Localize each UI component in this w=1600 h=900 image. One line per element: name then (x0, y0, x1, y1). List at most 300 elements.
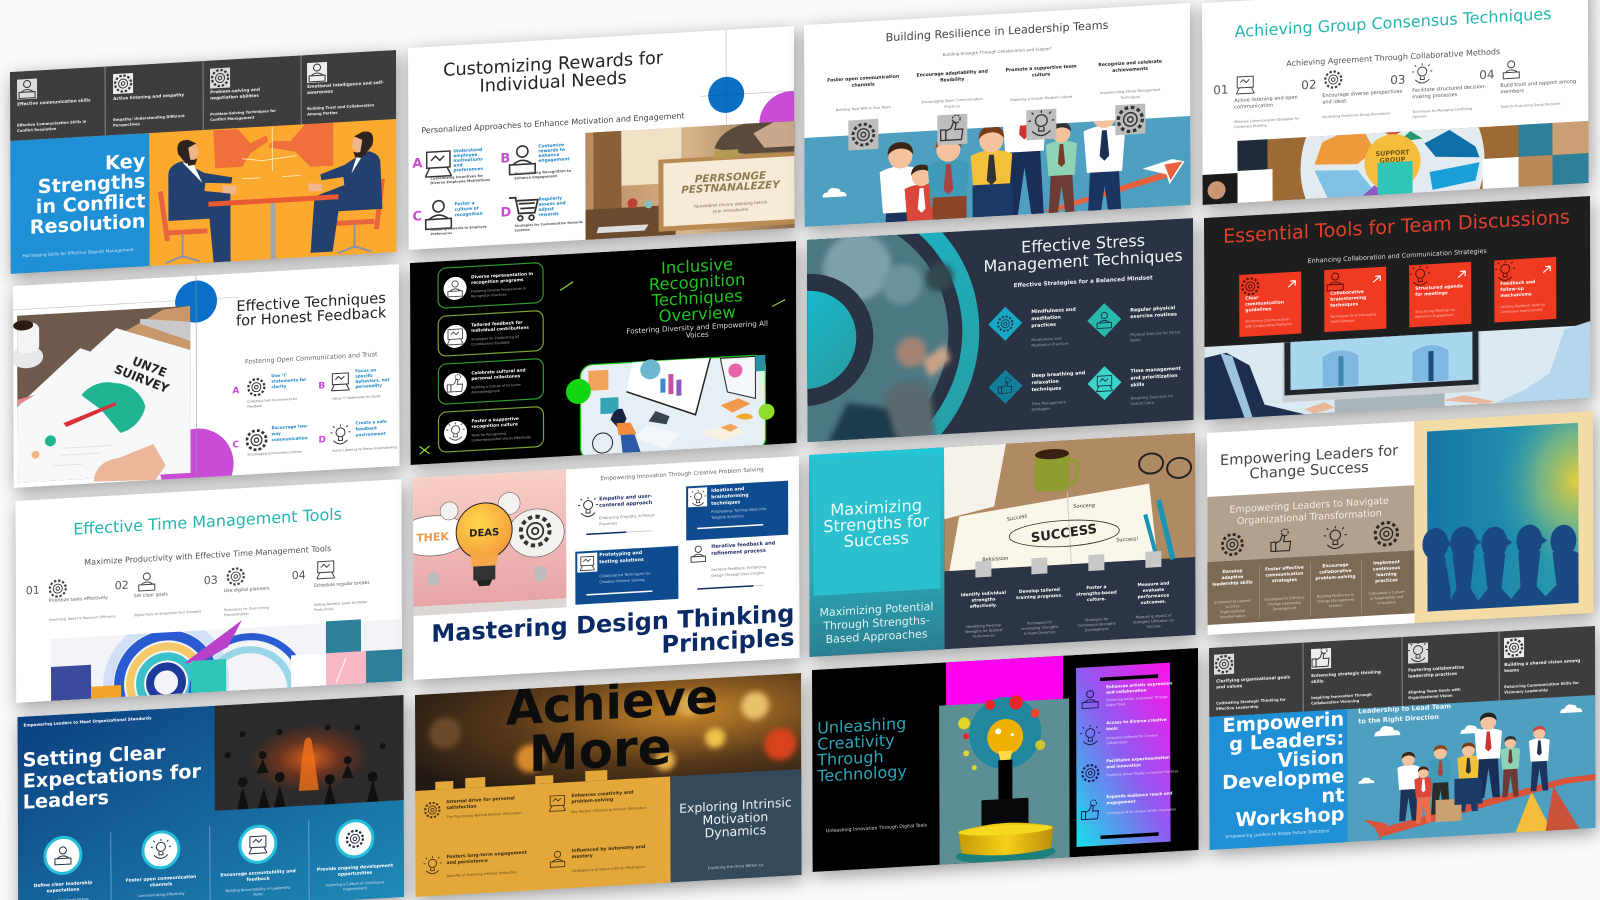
tan band (1207, 485, 1414, 562)
yellow panel: Influenced by autonomy and (571, 845, 645, 854)
panel: Achieving Group Consensus slide: Effective Communication Strategies for (1234, 116, 1299, 124)
step: ideation: brainstorming (711, 492, 749, 501)
column headings: culture (1032, 71, 1050, 79)
title panel: Key (105, 149, 145, 175)
panel: Essential Tools slide: Feedback and (1500, 280, 1535, 287)
step: iterative: Iterative Feedback: Enhancing (711, 565, 766, 572)
step: empathy: Empathy and user- (599, 493, 652, 502)
technique 3: techniques (1031, 386, 1061, 393)
panel: Achieving Group Consensus slide: Facilitating Productive Group Discussions (1322, 111, 1390, 119)
photo: survey on clipboard (11, 306, 191, 488)
yellow panel: mastery (572, 853, 593, 860)
panel: Inclusive Recognition slide: recognition culture (471, 421, 518, 430)
numbered steps: 03 (204, 573, 218, 587)
yellow panel: The Psychology Behind Intrinsic Motivation (445, 811, 522, 819)
title panel: Harnessing Skills for Effective Dispute Management (23, 247, 134, 259)
title: Change Success (1249, 459, 1369, 483)
panel: Maximizing Strengths slide: in Team Dynamics (1024, 630, 1056, 636)
illustration: negotiation at a table (160, 120, 383, 265)
blue panels (575, 481, 788, 605)
option A: A (412, 156, 422, 172)
panel: Maximizing Strengths slide: Development (1085, 627, 1109, 632)
brown band with columns: Empowering Leaders (1214, 599, 1251, 605)
yellow panel: Strategies to Enhance Intrinsic Motivation (572, 865, 645, 873)
panel: Inclusive Recognition slide: Foster a supportive (471, 417, 519, 425)
option C (412, 198, 487, 237)
image: silhouettes at dawn (1422, 423, 1579, 612)
expectation text: channels (150, 881, 173, 888)
numbered steps: 02 (115, 579, 129, 592)
panel: Vision Development Workshop slide (1209, 626, 1598, 855)
step: prototyping: testing solutions (599, 557, 644, 565)
brown band with columns: Implement (1373, 560, 1400, 567)
technique 4 (1088, 366, 1181, 406)
panel: Essential Tools slide (1204, 196, 1593, 425)
technique 2 (1087, 303, 1180, 342)
yellow panel: Internal drive for personal (446, 796, 515, 805)
top skills band: Problem-Solving Techniques for (210, 109, 276, 117)
panel: Honest Feedback slide (11, 264, 402, 513)
step: prototyping: Creative Problem Solving (599, 578, 645, 584)
panel: Achieving Group Consensus slide: Opinions (1412, 114, 1427, 119)
option C: C (233, 440, 240, 451)
option A: and (453, 162, 463, 169)
panel: Setting Clear Expectations slide: Building Accountability in Leadership (226, 885, 290, 893)
expectation text: expectations (47, 886, 80, 894)
option A: preferences (453, 166, 483, 174)
step: iterative: refinement process (711, 548, 766, 557)
neon list panel (1076, 662, 1179, 847)
option A: Feedback (247, 404, 262, 409)
yellow panel (415, 766, 671, 897)
title panel: Resolution (30, 209, 146, 239)
panel: Maximizing Strengths slide: Strengths for Optimal (965, 628, 1002, 634)
column headings: Encourage adaptability and (916, 70, 988, 79)
image: lightbulb ideas: DEAS (469, 527, 499, 540)
option D: Strategies for Customization Rewards (515, 220, 583, 228)
panel: Maximizing Strengths slide: Identifying Personal (966, 623, 1001, 629)
panel: Essential Tools slide: Techniques for Encouraging (1330, 312, 1376, 319)
numbered steps: 04 (1479, 67, 1495, 82)
option A: Customizing Incentives for (430, 174, 483, 181)
panel: Unleashing Creativity slide (812, 648, 1201, 877)
top skills band: Emotional intelligence and self- (307, 81, 384, 90)
technique 3: relaxation (1031, 379, 1060, 386)
panel: Building Resilience slide: Building Strength Through Collaboration and Support (943, 46, 1052, 57)
panel: Honest Feedback slide: Fostering Open Communication and Trust (245, 350, 378, 366)
technique 4: skills (1130, 382, 1144, 389)
top skills band: Perspectives (113, 122, 141, 128)
option D (500, 194, 583, 233)
panel: Achieve More slide: More (529, 717, 672, 784)
strength columns: Measure and (1137, 581, 1169, 588)
step: ideation (688, 484, 766, 530)
technique 1: Mindfulness and (1031, 308, 1076, 315)
photo: survey on clipboard: SUIRVEY (112, 362, 171, 396)
column subtext: Practices (944, 104, 960, 109)
photo with sign: your enesalsume (713, 207, 749, 214)
title panel (10, 133, 150, 274)
photo strip with wheel chart: GROUP (1380, 155, 1406, 165)
left title panel: Maximizing Potential (819, 600, 933, 619)
brown band with columns: leadership skills (1212, 579, 1253, 588)
panel: Inclusive Recognition slide: Strategies for Celebrating All (471, 335, 519, 342)
option A: employee (453, 152, 477, 159)
panel: Essential Tools slide: techniques (1330, 301, 1359, 309)
option B: Personalizing Recognition to (514, 169, 571, 176)
step: prototyping: Collaborative Techniques for (599, 571, 650, 578)
title: Overview (659, 302, 736, 326)
panel: Essential Tools slide: for meetings (1415, 290, 1448, 298)
numbered steps: 01 (1213, 83, 1229, 97)
column headings: Recognize and celebrate (1098, 60, 1162, 68)
numbered steps (1214, 70, 1494, 94)
option B: Using "I" Statements for Clarity (332, 394, 381, 401)
left title panel: Maximizing (830, 496, 922, 520)
neon list panel: Leveraging AI for Unique Artistic Inspiration (1106, 807, 1176, 815)
panel: Inclusive Recognition slide: Tools for Recognizing (472, 432, 506, 438)
top skills band: Inspiring Innovation Through (1311, 693, 1372, 700)
photo with sign: PERRSONGE (695, 170, 766, 186)
expectation text: opportunities (338, 870, 373, 878)
panel: Inclusive Recognition slide: Recognition Practices (471, 292, 507, 299)
top skills band: Empathy: Understanding Different (113, 114, 185, 122)
top skills band: skills (1311, 678, 1324, 685)
abstract graphic strip (51, 611, 402, 760)
numbered steps: 02 (1301, 77, 1317, 92)
technique 3 (988, 370, 1085, 411)
technique 1: Meditation Practices (1031, 342, 1069, 348)
photo: success notebook: Beksission (982, 556, 1008, 563)
top skills band: Building a shared vision among (1504, 659, 1580, 668)
strength columns: strengths (971, 596, 996, 604)
top skills band (10, 50, 396, 141)
title: Unleashing (817, 714, 906, 738)
strength columns: evaluate (1143, 587, 1164, 594)
top skills band: Effective Leadership (1216, 705, 1259, 711)
right title panel: Exploring Intrinsic (679, 795, 792, 816)
panel: Maximizing Strengths slide: Success (1147, 624, 1161, 629)
expectation text: Foster open communication (126, 875, 196, 884)
photo strip with wheel chart: SUPPORT (1375, 148, 1410, 158)
panel: Design Thinking slide (397, 456, 802, 686)
column headings: Foster open communication (827, 75, 899, 84)
step: ideation: Ideation and (711, 487, 744, 494)
panel: Inclusive Recognition slide: Celebrate cultural and (471, 368, 526, 377)
option C: recognition (455, 211, 483, 218)
yellow panel: Benefits of Fostering Intrinsic Motivation (447, 870, 517, 878)
column headings: achievements (1112, 66, 1148, 74)
option C: culture of (454, 206, 479, 213)
image: lightbulb ideas (397, 469, 566, 617)
option D: Create a safe (355, 419, 387, 426)
panel: Achieving Group Consensus slide: members (1500, 88, 1524, 96)
neon list panel: Enhances artistic expression (1106, 680, 1172, 689)
neon list panel: engagement (1106, 799, 1135, 805)
photo: meeting room (1204, 321, 1591, 420)
panel: Stress Management slide: Effective Strategies for a Balanced Mindset (1014, 275, 1153, 289)
brown band with columns: problem-solving (1315, 574, 1356, 582)
title panel: Workshop (1235, 802, 1345, 832)
column headings: Promote a supportive team (1006, 64, 1077, 74)
title: Effective Time Management Tools (73, 504, 342, 539)
panel: Essential Tools slide: guidelines (1245, 306, 1272, 314)
strength columns: Foster a (1086, 585, 1107, 591)
title panel (1209, 707, 1348, 850)
title: Principles (661, 623, 795, 659)
panel: Essential Tools slide: Collaborative (1330, 290, 1364, 297)
option B: behaviors, not (355, 377, 389, 384)
option B: specific (355, 373, 374, 379)
expectation text (34, 863, 394, 895)
technique 1: meditation (1031, 315, 1061, 322)
photo with sign (585, 121, 799, 240)
panel: Achieving Group Consensus slide: and ideas (1322, 98, 1347, 106)
panel: Achieving Group Consensus slide: Build trust and rapport among (1500, 79, 1576, 89)
magenta block and bulb sculpture (939, 655, 1070, 867)
neon list panel: Expands audience reach and (1106, 790, 1172, 799)
panel: Essential Tools slide: Maximum Engagement (1415, 313, 1454, 319)
strength columns (961, 580, 1169, 616)
option B: enhance (538, 152, 559, 159)
panel: Inclusive Recognition slide: Contributions Equitably (471, 340, 510, 347)
yellow panel: and persistence (447, 858, 488, 866)
strength columns: effectively. (970, 602, 997, 610)
brown band with columns: of Adaptability and (1370, 595, 1403, 601)
panel: Essential Tools slide: Utilizing Feedback Tools for (1500, 303, 1545, 309)
panel: Inclusive Recognition slide: Fostering Diversity and Empowering All (626, 319, 768, 336)
brown band with columns: Develop (1222, 569, 1242, 575)
panel: Essential Tools slide: communication (1245, 299, 1284, 308)
brown band with columns: Encourage (1322, 563, 1348, 569)
panel: Time Management slide (16, 479, 404, 762)
title panel: Empowerin (1222, 707, 1344, 737)
panel: Time Management slide: Prioritizing Tasks for Maximum Efficiency (49, 614, 116, 622)
technique 1 (988, 306, 1076, 347)
step: empathy: Processes (599, 521, 617, 526)
title panel: Vision (1278, 745, 1344, 772)
panel: Empowering Leaders for Change slide (1207, 411, 1596, 640)
panel: Achieving Group Consensus slide: Facilitate structured decision- (1412, 84, 1486, 94)
right title panel: Exploring the Drive Within Us (708, 862, 764, 870)
technique 3: Strategies (1032, 407, 1050, 412)
strength columns: training programs. (1016, 593, 1063, 601)
photo: bokeh night (415, 673, 801, 805)
technique 3: Deep breathing and (1031, 371, 1085, 379)
option C: Foster a (454, 201, 475, 207)
panel: Essential Tools slide: Enhancing Collaboration and Communication Strategies (1308, 247, 1487, 265)
step: iterative: Iterative feedback and (711, 540, 775, 550)
top skills band: Among Parties (307, 111, 338, 117)
brown band with columns: to Drive (1226, 604, 1240, 609)
brown band with columns: continuous (1373, 565, 1400, 573)
panel: Essential Tools slide: with Collaborative Platforms (1245, 322, 1292, 329)
subtitle: Personalized Approaches to Enhance Motivation and Engagement (421, 111, 685, 135)
column subtext: Fostering a Growth Mindset Culture (1010, 95, 1072, 102)
option D: feedback (355, 425, 377, 432)
brown band with columns: Innovation (1377, 600, 1396, 605)
panel: Time Management slide: Use digital planners (224, 586, 270, 594)
yellow panel: Key Factors Influencing Intrinsic Motivation (571, 806, 646, 814)
panel: Achieving Group Consensus slide: Achieving Agreement Through Collaborative Methods (1286, 47, 1500, 68)
option D: Regularly (538, 196, 562, 203)
top skills band: Conflict Resolution (17, 127, 57, 133)
brown band with columns: Building Resilience in (1317, 593, 1354, 599)
technique 4: Breathing Exercises for (1131, 394, 1173, 401)
top skills band: Active listening and empathy (113, 92, 184, 102)
numbered steps: 03 (1390, 72, 1406, 87)
title panel: g Leaders: (1229, 726, 1344, 756)
strength columns: Identify individual (961, 591, 1006, 598)
option D: Systems (515, 228, 530, 232)
option B: B (318, 381, 325, 392)
left title panel: Success (844, 528, 909, 551)
photo strip with wheel chart (1202, 121, 1589, 205)
panel: Setting Clear Expectations slide: Expectations for (23, 760, 201, 793)
panel: Time Management slide: Maximize Productivity with Effective Time Management Tools (84, 543, 331, 567)
technique 4: and prioritization (1130, 373, 1178, 382)
option A: Understand (453, 148, 482, 154)
panel: Maximizing Strengths slide: Measuring Impact of (1136, 613, 1171, 619)
title: Customizing Rewards for (443, 48, 663, 81)
expectation text: Provide ongoing development (317, 864, 393, 873)
panel: Achieving Group Consensus slide: Encourage diverse perspectives (1322, 89, 1402, 99)
title panel: in Conflict (36, 189, 145, 219)
panel: Achieving Group Consensus slide: communication (1234, 102, 1273, 111)
top skills band: leadership practices (1408, 671, 1458, 680)
top skills band: Collaborative Visioning (1311, 699, 1360, 706)
step: iterative (691, 540, 776, 590)
top skills band: negotiation abilities (210, 93, 259, 102)
left title panel: Through Strengths- (822, 614, 930, 633)
brown band with columns (1207, 550, 1415, 625)
title: Recognition (649, 270, 745, 294)
neon list panel: and innovation (1106, 762, 1141, 769)
headline: Achieve (506, 669, 718, 737)
photo with sign: PESTNANALEZEY (681, 179, 781, 196)
brown band with columns: Foster effective (1265, 566, 1304, 573)
title panel: Developme (1222, 764, 1344, 794)
top skills band: Cultivating Strategic Thinking for (1216, 698, 1286, 706)
top skills band: Visionary Leadership (1504, 688, 1548, 695)
panel: Time Management slide: Productivity (314, 607, 333, 612)
panel: Inclusive Recognition slide: Diverse representation in (471, 272, 533, 281)
neon list panel: Facilitates experimentation (1106, 755, 1170, 763)
option A: motivations (453, 156, 483, 164)
brown band with columns: strategies (1272, 577, 1297, 584)
panel: Time Management slide: Setting Realistic Goals for Better (314, 600, 368, 607)
top skills band (1209, 626, 1595, 717)
step: empathy (578, 493, 656, 536)
icon tiles (848, 104, 1145, 150)
option A (232, 371, 307, 410)
step: prototyping: Prototyping and (599, 551, 642, 558)
panel: Unleashing Creativity slide: Unleashing Innovation Through Digital Tools (826, 822, 928, 834)
panel: Time Management slide: Procrastination (224, 612, 249, 617)
technique 2: Physical Exercise for Stress (1130, 330, 1181, 337)
panel: Time Management slide: Techniques for Overcoming (224, 606, 269, 612)
strength columns: performance (1138, 592, 1169, 600)
expectation icons (45, 820, 373, 874)
photo circle with rings (807, 232, 980, 442)
step: empathy: Embracing Empathy in Design (599, 513, 655, 520)
panel: Achieving Group Consensus slide: making processes (1412, 92, 1458, 101)
left title panel: Strengths for (823, 511, 930, 536)
option A (412, 146, 490, 186)
left title panel (809, 447, 945, 657)
expectation text: feedback (246, 876, 271, 883)
panel: Achieving Group Consensus slide: Tools for Evaluating Group Decisions (1499, 102, 1561, 109)
panel: Setting Clear Expectations slide (18, 695, 406, 900)
title: Creativity (817, 730, 895, 754)
column subtext: Building Trust Within Your Team (836, 105, 891, 112)
option B: rewards to (538, 147, 565, 154)
option C: way (271, 431, 281, 436)
side caption: to the Right Direction (1358, 713, 1439, 726)
title panel: nt (1321, 783, 1344, 808)
option A: statements for (271, 377, 307, 384)
panel: Time Management slide: Schedule regular breaks (314, 580, 370, 589)
neon list panel: and collaboration (1106, 687, 1147, 695)
strength columns: culture. (1087, 596, 1106, 603)
title: for Honest Feedback (236, 304, 387, 330)
photo: survey on clipboard: UN7E (130, 354, 169, 380)
panel: Setting Clear Expectations slide: Communicating Effectively (138, 892, 185, 898)
panel: Inclusive Recognition slide: Voices (686, 329, 709, 340)
title: Inclusive (661, 255, 733, 278)
technique 3: Time Management (1032, 400, 1066, 406)
red cards (1239, 257, 1556, 337)
technique 1: practices (1031, 322, 1056, 329)
top skills band: Problem-solving and (210, 88, 260, 96)
photo: success notebook (944, 433, 1195, 573)
numbered steps: 01 (26, 584, 40, 597)
panel: Inclusive Recognition slide: personal milestones (471, 373, 521, 382)
step: empathy: centered approach (599, 500, 653, 509)
panel: Setting Clear Expectations slide: Fostering a Culture of Continuous (326, 880, 384, 887)
top skills band: Enhancing Communication Skills for (1504, 681, 1579, 689)
title: Individual Needs (479, 69, 627, 97)
option C: Encourage two- (271, 423, 308, 430)
team illustration (804, 116, 1190, 227)
panel: Inclusive Recognition slide: individual contributions (471, 325, 529, 334)
option B: engagement (538, 156, 569, 164)
option B: Customize (538, 143, 564, 150)
technique 2: Regular physical (1130, 306, 1175, 314)
photo with sign: Yourvelansl rincore staniong hetnih (694, 200, 767, 209)
title: Through (816, 747, 884, 770)
illustration: team on arrow (1358, 703, 1596, 842)
panel: Building Resilience slide (804, 3, 1193, 277)
top skills band: awareness (307, 89, 333, 96)
step: ideation: techniques (711, 499, 740, 507)
image: lightbulb ideas: THEK (416, 530, 449, 545)
option B: personality (355, 383, 382, 389)
title: Management Techniques (983, 246, 1183, 276)
column headings (828, 60, 1162, 87)
yellow panel: problem-solving (571, 797, 613, 805)
cards (438, 262, 544, 452)
option B (319, 369, 390, 400)
yellow panel: Enhances creativity and (571, 791, 634, 799)
brown band with columns: Development (1273, 606, 1297, 611)
option C: C (412, 209, 422, 225)
tan band: Empowering Leaders to Navigate (1229, 496, 1389, 516)
column headings: channels (852, 81, 875, 89)
panel: Essential Tools slide: Structured agenda (1415, 284, 1463, 292)
brown band with columns: practices (1375, 577, 1398, 584)
title: Essential Tools for Team Discussions (1223, 205, 1570, 248)
